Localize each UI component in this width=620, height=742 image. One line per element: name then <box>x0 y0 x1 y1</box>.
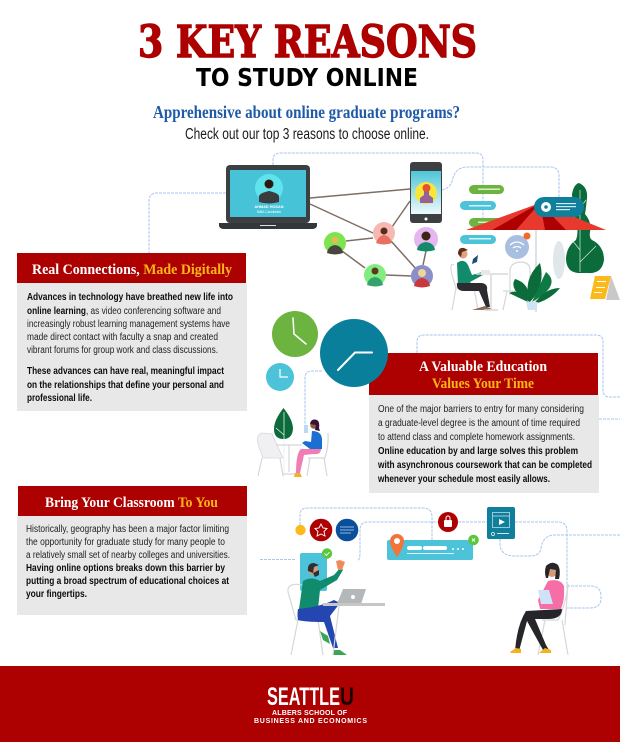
icon: star badge <box>310 519 332 541</box>
body text: valuable education: a graduate-level degree is the amount of time required <box>378 418 580 429</box>
sandwich board sign <box>590 276 620 300</box>
logo: Seattle U: SEATTLE <box>267 683 340 711</box>
chairs and table <box>258 433 283 458</box>
panel: real connections <box>17 253 247 411</box>
man with laptop <box>288 560 385 655</box>
body text: bring your classroom <box>26 524 230 600</box>
icon: small blue clock <box>266 363 294 391</box>
connector lines <box>149 153 620 608</box>
icon: lock badge <box>438 512 458 532</box>
intro text: Apprehensive about online graduate programs? <box>153 102 460 122</box>
icon: laptop: AHMAD HOSAN <box>255 205 284 209</box>
body text: bring your classroom: Having online options breaks down this barrier by <box>26 563 225 574</box>
small pale tree <box>553 241 565 279</box>
umbrella <box>466 197 606 312</box>
body text: real connections: increasingly robust learning management systems have <box>27 319 230 330</box>
body text: real connections: on the relationships that define your personal and <box>27 380 224 391</box>
icon: message badge <box>336 519 358 541</box>
icon: laptop: MBA Candidate <box>257 210 281 214</box>
body text: real connections: Advances in technology have breathed new life into <box>27 292 233 303</box>
network links <box>310 189 426 276</box>
intro text <box>153 102 460 143</box>
icon: laptop <box>219 165 317 229</box>
body text: bring your classroom: your fingertips. <box>26 589 87 600</box>
tree <box>274 408 293 439</box>
woman with tablet <box>510 563 568 655</box>
body text: real connections: made direct contact with faculty a snap and created <box>27 332 218 343</box>
title: 3 KEY REASONS <box>138 17 477 68</box>
body text: valuable education: whenever your schedule most easily allows. <box>377 474 550 485</box>
person nodes <box>324 222 438 288</box>
title: TO STUDY ONLINE <box>196 63 418 92</box>
heading: valuable education: Values Your Time <box>432 376 534 392</box>
body text: bring your classroom: putting a broad spectrum of educational choices at <box>26 576 230 587</box>
potted plant <box>509 263 560 310</box>
heading: valuable education <box>419 359 548 392</box>
laptop and desk <box>337 589 366 604</box>
heading: bring your classroom: Bring Your Classroom To You <box>45 495 218 511</box>
body text: valuable education: One of the major barriers to entry for many considering <box>378 404 584 415</box>
icon: wifi <box>505 232 530 259</box>
body text: valuable education <box>377 404 592 485</box>
icon: large teal clock <box>320 319 388 387</box>
logo: Seattle U: U <box>340 683 354 711</box>
icon: video panel <box>487 507 515 539</box>
title <box>138 17 477 92</box>
body text: bring your classroom: a relatively small set of nearby colleges and universities. <box>26 550 230 561</box>
icon: yellow dot <box>295 525 306 535</box>
footer band <box>0 666 620 742</box>
heading: valuable education: A Valuable Education <box>419 359 548 375</box>
body text: valuable education: to attend class and complete homework assignments. <box>378 432 575 443</box>
illustration: woman at table <box>258 408 328 477</box>
panel: bring your classroom <box>17 486 247 615</box>
tree <box>566 183 604 273</box>
body text: real connections: These advances can have real, meaningful impact <box>27 366 225 377</box>
heading: real connections: Real Connections, Made Digitally <box>32 262 232 278</box>
chat pills <box>460 185 504 244</box>
logo: Seattle U: ALBERS SCHOOL OF <box>272 710 348 717</box>
teal screen with check <box>300 548 332 591</box>
logo: Seattle U <box>254 683 367 725</box>
woman <box>302 431 322 449</box>
logo: Seattle U: BUSINESS AND ECONOMICS <box>254 718 367 725</box>
body text: valuable education: Online education by and large solves this problem <box>378 446 578 457</box>
illustration: remote classroom scene <box>288 507 568 655</box>
body text: bring your classroom: Historically, geography has been a major factor limiting <box>26 524 229 535</box>
illustration: network of connected people <box>219 162 442 288</box>
body text: real connections <box>27 292 233 404</box>
body text: real connections: online learning, as video conferencing software and <box>27 306 221 317</box>
intro text: Check out our top 3 reasons to choose online. <box>185 126 429 143</box>
body text: bring your classroom: the opportunity for graduate study for many people to <box>26 537 225 548</box>
icon: green clock <box>272 311 318 357</box>
icon: phone <box>410 162 442 223</box>
body text: real connections: professional life. <box>27 393 92 404</box>
location card <box>387 534 479 560</box>
person at cafe table <box>451 248 530 310</box>
panel: valuable education <box>369 353 599 493</box>
body text: real connections: vibrant forums for group work and class discussions. <box>27 345 218 356</box>
illustration: cafe scene with umbrella <box>451 183 620 312</box>
